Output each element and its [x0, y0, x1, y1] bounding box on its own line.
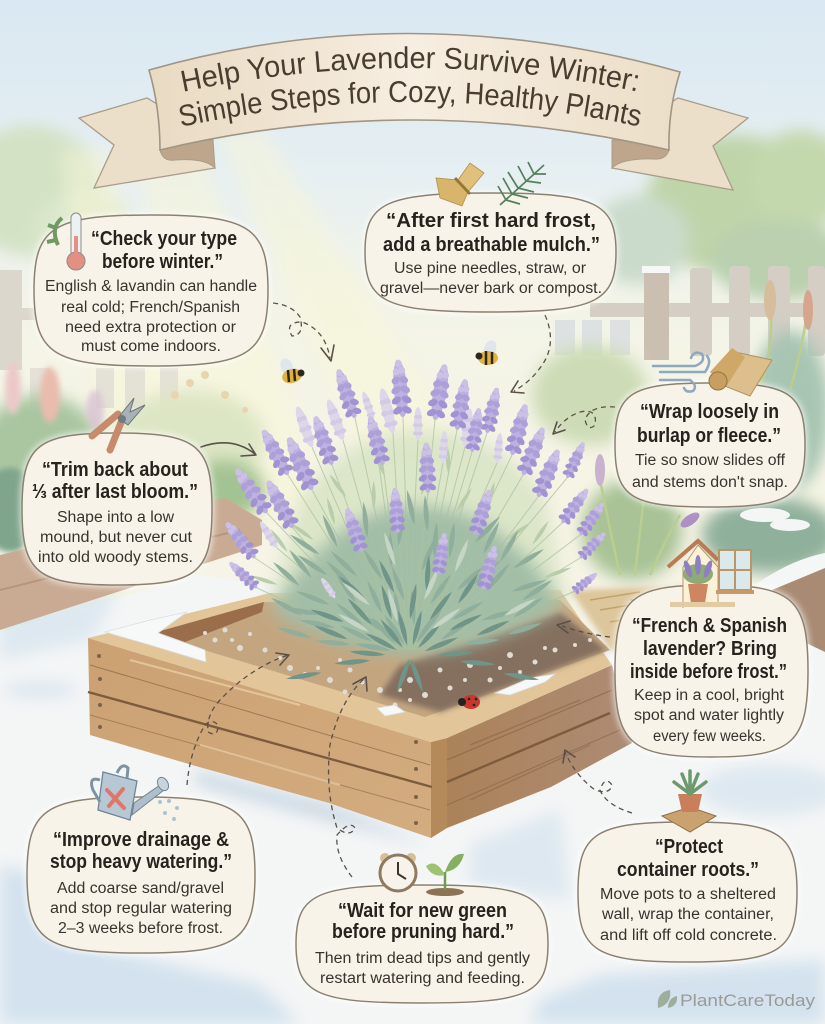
card: french and spanish lavender: “French & Spanish	[632, 615, 787, 637]
icon: watering can	[92, 766, 179, 821]
raised wooden bed	[88, 590, 632, 838]
card: wait for new green: Then trim dead tips and gently	[315, 950, 530, 967]
card: wrap loosely: burlap or fleece.”	[637, 425, 781, 447]
plant foliage haze	[270, 430, 565, 600]
card: trim back: ⅓ after last bloom.”	[32, 481, 198, 503]
card: french and spanish lavender: every few weeks.	[653, 728, 766, 745]
background: left garden plants	[0, 362, 265, 552]
card: check your type	[34, 213, 268, 366]
icon: thermometer and leaf	[47, 213, 85, 270]
icon: bee right	[476, 338, 499, 365]
card: trim back	[22, 398, 212, 585]
arrow: type to plant	[273, 303, 334, 361]
bed left face	[88, 638, 431, 838]
card: wrap loosely: and stems don't snap.	[632, 474, 788, 491]
plant stems	[255, 417, 580, 650]
bed soil	[157, 600, 610, 717]
icon: wind	[653, 353, 709, 392]
card: trim back: “Trim back about	[42, 459, 188, 481]
upper pale leaves	[250, 445, 572, 586]
icon: alarm clock	[380, 853, 416, 891]
arrow: protect to bed	[563, 750, 632, 813]
card: wrap loosely: Tie so snow slides off	[635, 452, 786, 469]
card: breathable mulch: add a breathable mulch.”	[383, 234, 600, 256]
gravel	[203, 628, 592, 708]
icon: pine sprig	[498, 162, 546, 205]
card: breathable mulch: Use pine needles, straw, or	[394, 260, 586, 277]
arrow: wrap to plant	[553, 407, 615, 434]
card: wrap loosely: “Wrap loosely in	[640, 401, 779, 423]
icon: bee left	[278, 356, 304, 385]
card: check your type: “Check your type	[91, 228, 237, 250]
straw mulch	[570, 585, 720, 652]
card: wait for new green	[296, 853, 548, 1003]
card: improve drainage: and stop regular watering	[50, 900, 232, 917]
title banner	[78, 32, 750, 191]
icon: seedling	[426, 854, 464, 896]
arrow: french to soil	[557, 621, 610, 637]
card: breathable mulch	[365, 162, 616, 312]
card: breathable mulch: “After first hard frost,	[386, 210, 596, 232]
background: sun rays	[60, 130, 470, 520]
background: fence	[0, 266, 825, 408]
banner right curl	[612, 140, 669, 168]
card: check your type: real cold; French/Spanish	[61, 299, 240, 316]
snow on bed	[105, 612, 555, 716]
card: french and spanish lavender: lavender? Bring	[643, 638, 777, 660]
card: check your type: English & lavandin can handle	[45, 278, 257, 295]
card: trim back: into old woody stems.	[38, 549, 193, 566]
card: check your type: must come indoors.	[81, 338, 221, 355]
title text: Help Your Lavender Survive Winter:	[181, 46, 638, 92]
card: breathable mulch: gravel—never bark or compost.	[380, 280, 602, 297]
icon: potted plant on block	[662, 771, 716, 832]
icon: pruning shears	[92, 398, 145, 450]
plant leaves	[270, 489, 554, 653]
bed corner post	[431, 738, 447, 838]
icon: burlap roll	[709, 348, 772, 396]
card: wait for new green: before pruning hard.”	[332, 921, 514, 943]
card: protect container roots: “Protect	[655, 836, 723, 858]
card: improve drainage: 2–3 weeks before frost.	[58, 920, 223, 937]
pale lavender spikes	[257, 387, 505, 600]
lavender plant	[219, 359, 610, 694]
card: improve drainage	[27, 766, 255, 953]
card: protect container roots	[578, 771, 797, 962]
card: french and spanish lavender: spot and water lightly	[634, 707, 784, 724]
card: improve drainage: “Improve drainage &	[53, 829, 229, 851]
purple lavender spikes	[219, 359, 610, 597]
card: french and spanish lavender: Keep in a cool, bright	[634, 687, 785, 704]
card: trim back: Shape into a low	[57, 509, 175, 526]
arrow: drainage to soil	[187, 653, 289, 785]
background: snow shadows	[0, 590, 825, 1024]
card: wrap loosely	[615, 348, 805, 507]
card: improve drainage: Add coarse sand/gravel	[57, 880, 224, 897]
card: improve drainage: stop heavy watering.”	[50, 851, 232, 873]
icon: ladybug	[458, 695, 480, 709]
background: snow ground	[0, 575, 825, 1024]
card: protect container roots: wall, wrap the container,	[601, 906, 774, 923]
arrow: trim to plant	[201, 443, 256, 456]
card: check your type: need extra protection or	[65, 319, 236, 336]
background: right garden plants	[532, 280, 825, 580]
card: wait for new green: restart watering and feeding.	[320, 970, 525, 987]
icon: house with potted lavender	[668, 541, 754, 608]
card: wait for new green: “Wait for new green	[338, 900, 507, 922]
card: protect container roots: container roots.”	[617, 859, 759, 881]
banner body	[149, 33, 680, 150]
card: french and spanish lavender: inside before frost.”	[630, 661, 787, 683]
banner left tail	[79, 98, 215, 188]
card: protect container roots: and lift off cold concrete.	[600, 927, 777, 944]
subtitle text: Simple Steps for Cozy, Healthy Plants	[180, 81, 641, 126]
banner right tail	[612, 98, 748, 190]
logo: PlantCareToday: PlantCareToday	[680, 991, 816, 1010]
bed right face	[447, 665, 632, 828]
icon: straw bundle	[436, 163, 484, 206]
arrow: wait to soil	[329, 677, 367, 877]
card: trim back: mound, but never cut	[40, 529, 193, 546]
card: check your type: before winter.”	[102, 251, 223, 273]
background: distant trees	[0, 125, 825, 300]
bed rim	[88, 590, 612, 742]
arrow: mulch to plant	[511, 315, 550, 393]
background: rear raised beds	[0, 498, 825, 652]
card: french and spanish lavender	[615, 541, 808, 757]
card: protect container roots: Move pots to a sheltered	[600, 886, 776, 903]
banner left curl	[160, 140, 215, 168]
